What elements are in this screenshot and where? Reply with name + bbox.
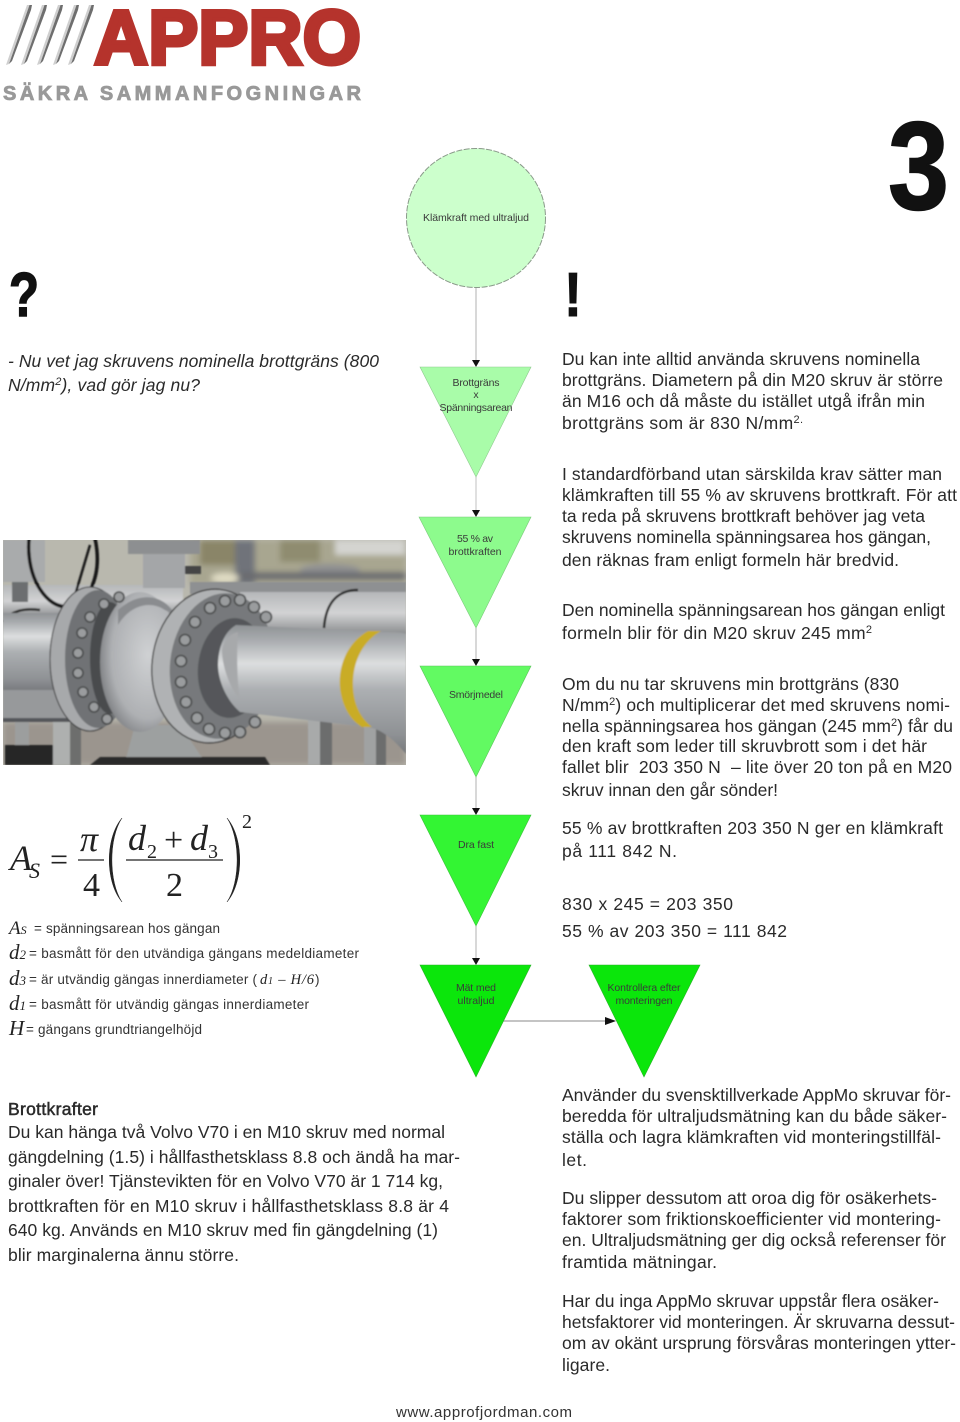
arrow: measure to verify <box>503 1017 616 1025</box>
node: measure with ultrasound: ultraljud <box>458 995 495 1007</box>
legend: A_S <box>7 918 220 939</box>
text: breaking forces <box>8 1099 460 1265</box>
text: standard joints: klämkraften till 55 % av skruvens brottkraft. För att <box>562 485 957 505</box>
text: nominal stress area: Den nominella spänningsarean hos gängan enligt <box>562 600 945 620</box>
text: breaking force calculation: fallet blir 203 350 N – lite över 20 ton på en M20 <box>562 757 952 777</box>
formula: stress area: 2 <box>166 867 183 904</box>
arrow: lubricant to tighten <box>472 777 480 815</box>
formula: stress area: A <box>8 838 33 878</box>
flow chart <box>406 148 700 1077</box>
arrow: 55 percent to lubricant <box>472 628 480 666</box>
gearbox and stem <box>3 540 45 582</box>
text: nominal breaking limit: Du kan inte alltid använda skruvens nominella <box>562 349 920 369</box>
text: standard joints: I standardförband utan särskilda krav sätter man <box>562 464 942 484</box>
formula: stress area: 4 <box>83 867 100 904</box>
text: clamp force result: 55 % av brottkraften 203 350 N ger en klämkraft <box>562 818 943 838</box>
text: breaking force calculation <box>562 674 953 800</box>
arrow: breaking limit to 55 percent <box>472 477 480 517</box>
text: calculations <box>562 894 787 941</box>
text: nominal breaking limit: brottgräns. Diametern på din M20 skruv är större <box>562 370 943 390</box>
text: clamp force result: på 111 842 N. <box>562 841 677 861</box>
formula: stress area: d <box>190 818 209 858</box>
question mark icon: ? <box>9 261 39 330</box>
node: verify after installation: monteringen <box>616 995 673 1007</box>
right flange <box>150 588 238 744</box>
arrow: tighten to measure <box>472 926 480 965</box>
text: standard joints: skruvens nominella spänningsarea hos gängan, <box>562 527 931 547</box>
text: standard joints: ta reda på skruvens brottkraft behöver jag veta <box>562 506 925 526</box>
formula: stress area: 2 <box>147 841 157 863</box>
legend: d3 <box>9 966 320 990</box>
body: breaking forces text: 640 kg. Används en M10 skruv med fin gängdelning (1) <box>8 1220 438 1240</box>
question text <box>8 351 379 395</box>
legend: d3: d1 – H/6 <box>260 972 315 988</box>
text: calculations: 830 x 245 = 203 350 <box>562 894 733 914</box>
text: AppMo screws: let. <box>562 1150 587 1170</box>
node: 55 percent of breaking force <box>419 517 531 628</box>
text: without AppMo screws <box>562 1291 956 1375</box>
node: breaking limit x stress area <box>420 367 531 477</box>
supports <box>14 724 30 746</box>
text: uncertainty factors: en. Ultraljudsmätning ger dig också referenser för <box>562 1230 946 1250</box>
handwheel <box>26 540 100 609</box>
text: breaking force calculation: N/mm <box>562 695 609 715</box>
text: nominal breaking limit: 2. <box>793 414 803 426</box>
formula: stress area: 2 <box>242 811 252 833</box>
flange bolts <box>73 592 272 738</box>
node: clamp force circle <box>406 148 546 288</box>
left flange <box>48 586 105 732</box>
text: breaking force calculation: ) och multiplicerar det med skruvens nomi- <box>615 695 950 715</box>
yellow band <box>340 631 381 727</box>
formula: stress area: 3 <box>208 841 218 863</box>
body: breaking forces text: gängdelning (1.5) i hållfasthetsklass 8.8 och ändå ha mar- <box>8 1147 460 1167</box>
legend: A_S: = spänningsarean hos gängan <box>34 921 220 936</box>
legend: H: = gängans grundtriangelhöjd <box>26 1022 202 1037</box>
text: calculations: 55 % av 203 350 = 111 842 <box>562 921 787 941</box>
node: breaking limit x stress area: x <box>473 389 479 401</box>
node: 55 percent of breaking force: 55 % av <box>457 533 494 545</box>
node: breaking limit x stress area: Spänningsarean <box>440 402 513 414</box>
text: breaking force calculation: 2 <box>609 696 615 708</box>
text: nominal stress area <box>562 600 945 643</box>
text: AppMo screws: ställa och lagra klämkraften vid monteringstillfäl- <box>562 1127 941 1147</box>
text: AppMo screws: beredda för ultraljudsmätning kan du både säker- <box>562 1106 947 1126</box>
logo: Appro <box>3 0 362 105</box>
back pipes <box>190 582 406 594</box>
text: uncertainty factors <box>562 1188 946 1272</box>
text: breaking force calculation: Om du nu tar skruvens min brottgräns (830 <box>562 674 899 694</box>
text: nominal breaking limit <box>562 349 943 433</box>
body: breaking forces text <box>8 1122 460 1265</box>
footer: website: www.approfjordman.com <box>395 1404 572 1421</box>
exclamation mark icon: ! <box>564 261 582 330</box>
legend: d3: = är utvändig gängas innerdiameter ( <box>29 972 258 987</box>
formula: stress area: π <box>80 819 99 859</box>
node: verify after installation: Kontrollera efter <box>608 982 681 994</box>
text: uncertainty factors: faktorer som friktionskoefficienter vid montering- <box>562 1209 941 1229</box>
legend: H <box>8 1016 202 1040</box>
text: without AppMo screws: hetsfaktorer vid monteringen. Är skruvarna dessut- <box>562 1312 955 1332</box>
page number: 3 <box>888 97 949 236</box>
text: standard joints: den räknas fram enligt formeln här bredvid. <box>562 550 899 570</box>
text: without AppMo screws: Har du inga AppMo skruvar uppstår flera osäker- <box>562 1291 939 1311</box>
text: AppMo screws: Använder du svensktillverkade AppMo skruvar för- <box>562 1085 951 1105</box>
node: tighten: Dra fast <box>458 839 494 851</box>
icon: logo slashes <box>6 5 94 65</box>
text: breaking force calculation: 2 <box>891 717 897 729</box>
text: clamp force result <box>562 818 943 861</box>
formula: stress area: S <box>29 858 40 883</box>
text: AppMo screws <box>562 1085 951 1170</box>
question text: N/mm <box>8 375 55 395</box>
text: nominal breaking limit: brottgräns som är 830 N/mm <box>562 413 793 433</box>
text: breaking force calculation: skruv innan den går sönder! <box>562 780 778 800</box>
question text: ), vad gör jag nu? <box>59 375 200 395</box>
question text: 2 <box>54 376 61 388</box>
text: uncertainty factors: Du slipper dessutom att oroa dig för osäkerhets- <box>562 1188 937 1208</box>
formula: stress area <box>8 811 252 904</box>
formula: stress area: = <box>50 841 68 877</box>
node: breaking limit x stress area: Brottgräns <box>452 377 500 389</box>
body: breaking forces text: Du kan hänga två Volvo V70 i en M10 skruv med normal <box>8 1122 445 1142</box>
text: breaking force calculation: den kraft som leder till skruvbrott som i det här <box>562 736 927 756</box>
text: without AppMo screws: ligare. <box>562 1355 610 1375</box>
text: nominal breaking limit: än M16 och då måste du istället utgå ifrån min <box>562 391 925 411</box>
heading: Brottkrafter: Brottkrafter <box>8 1099 98 1119</box>
node: lubricant <box>420 666 531 777</box>
text: breaking force calculation: ) får du <box>897 716 953 736</box>
logo tagline: SÄKRA SAMMANFOGNINGAR <box>3 82 362 105</box>
text: without AppMo screws: om av okänt ursprung försvåras monteringen ytter- <box>562 1333 956 1353</box>
text: breaking force calculation: nella spänningsarea hos gängan (245 mm <box>562 716 891 736</box>
legend: A_S: AS <box>7 918 27 939</box>
legend: d3: d3 <box>9 966 26 990</box>
node: 55 percent of breaking force: brottkraften <box>448 546 502 558</box>
legend: d1: = basmått för utvändig gängas innerdiameter <box>29 997 310 1012</box>
node: measure with ultrasound: Mät med <box>456 982 496 994</box>
formula legend <box>7 918 360 1040</box>
legend: d2: = basmått för den utvändiga gängans medeldiameter <box>29 946 360 961</box>
photo: pipeline flange with bolts <box>3 540 406 765</box>
legend: d3: ) <box>315 972 320 987</box>
node: verify after installation <box>589 965 700 1077</box>
text: standard joints <box>562 464 957 570</box>
legend: d2 <box>9 940 360 964</box>
body: breaking forces text: brottkraften för en M10 skruv i hållfasthetsklass 8.8 är 4 <box>8 1196 449 1216</box>
body: breaking forces text: ginaler över! Tjänstevikten för en Volvo V70 är 1 714 kg, <box>8 1171 443 1191</box>
question text: - Nu vet jag skruvens nominella brottgräns (800 <box>8 351 379 371</box>
legend: d1 <box>9 991 310 1015</box>
node: measure with ultrasound <box>420 965 531 1077</box>
body: breaking forces text: blir marginalerna ännu större. <box>8 1245 239 1265</box>
node: clamp force circle: Klämkraft med ultraljud <box>423 212 529 224</box>
legend: d1: d1 <box>9 991 26 1015</box>
main pipe <box>218 625 406 754</box>
legend: d2: d2 <box>9 940 26 964</box>
node: tighten <box>420 815 531 926</box>
legend: H: H <box>8 1016 26 1040</box>
formula: stress area: + <box>164 822 183 859</box>
left pipe <box>3 612 56 691</box>
formula: stress area: d <box>128 818 147 858</box>
text: uncertainty factors: framtida mätningar. <box>562 1252 717 1272</box>
text: nominal stress area: formeln blir för din M20 skruv 245 mm <box>562 623 866 643</box>
node: lubricant: Smörjmedel <box>449 689 503 701</box>
text: nominal stress area: 2 <box>866 624 872 636</box>
arrow: circle to breaking limit <box>472 288 480 367</box>
valve body <box>99 592 170 732</box>
